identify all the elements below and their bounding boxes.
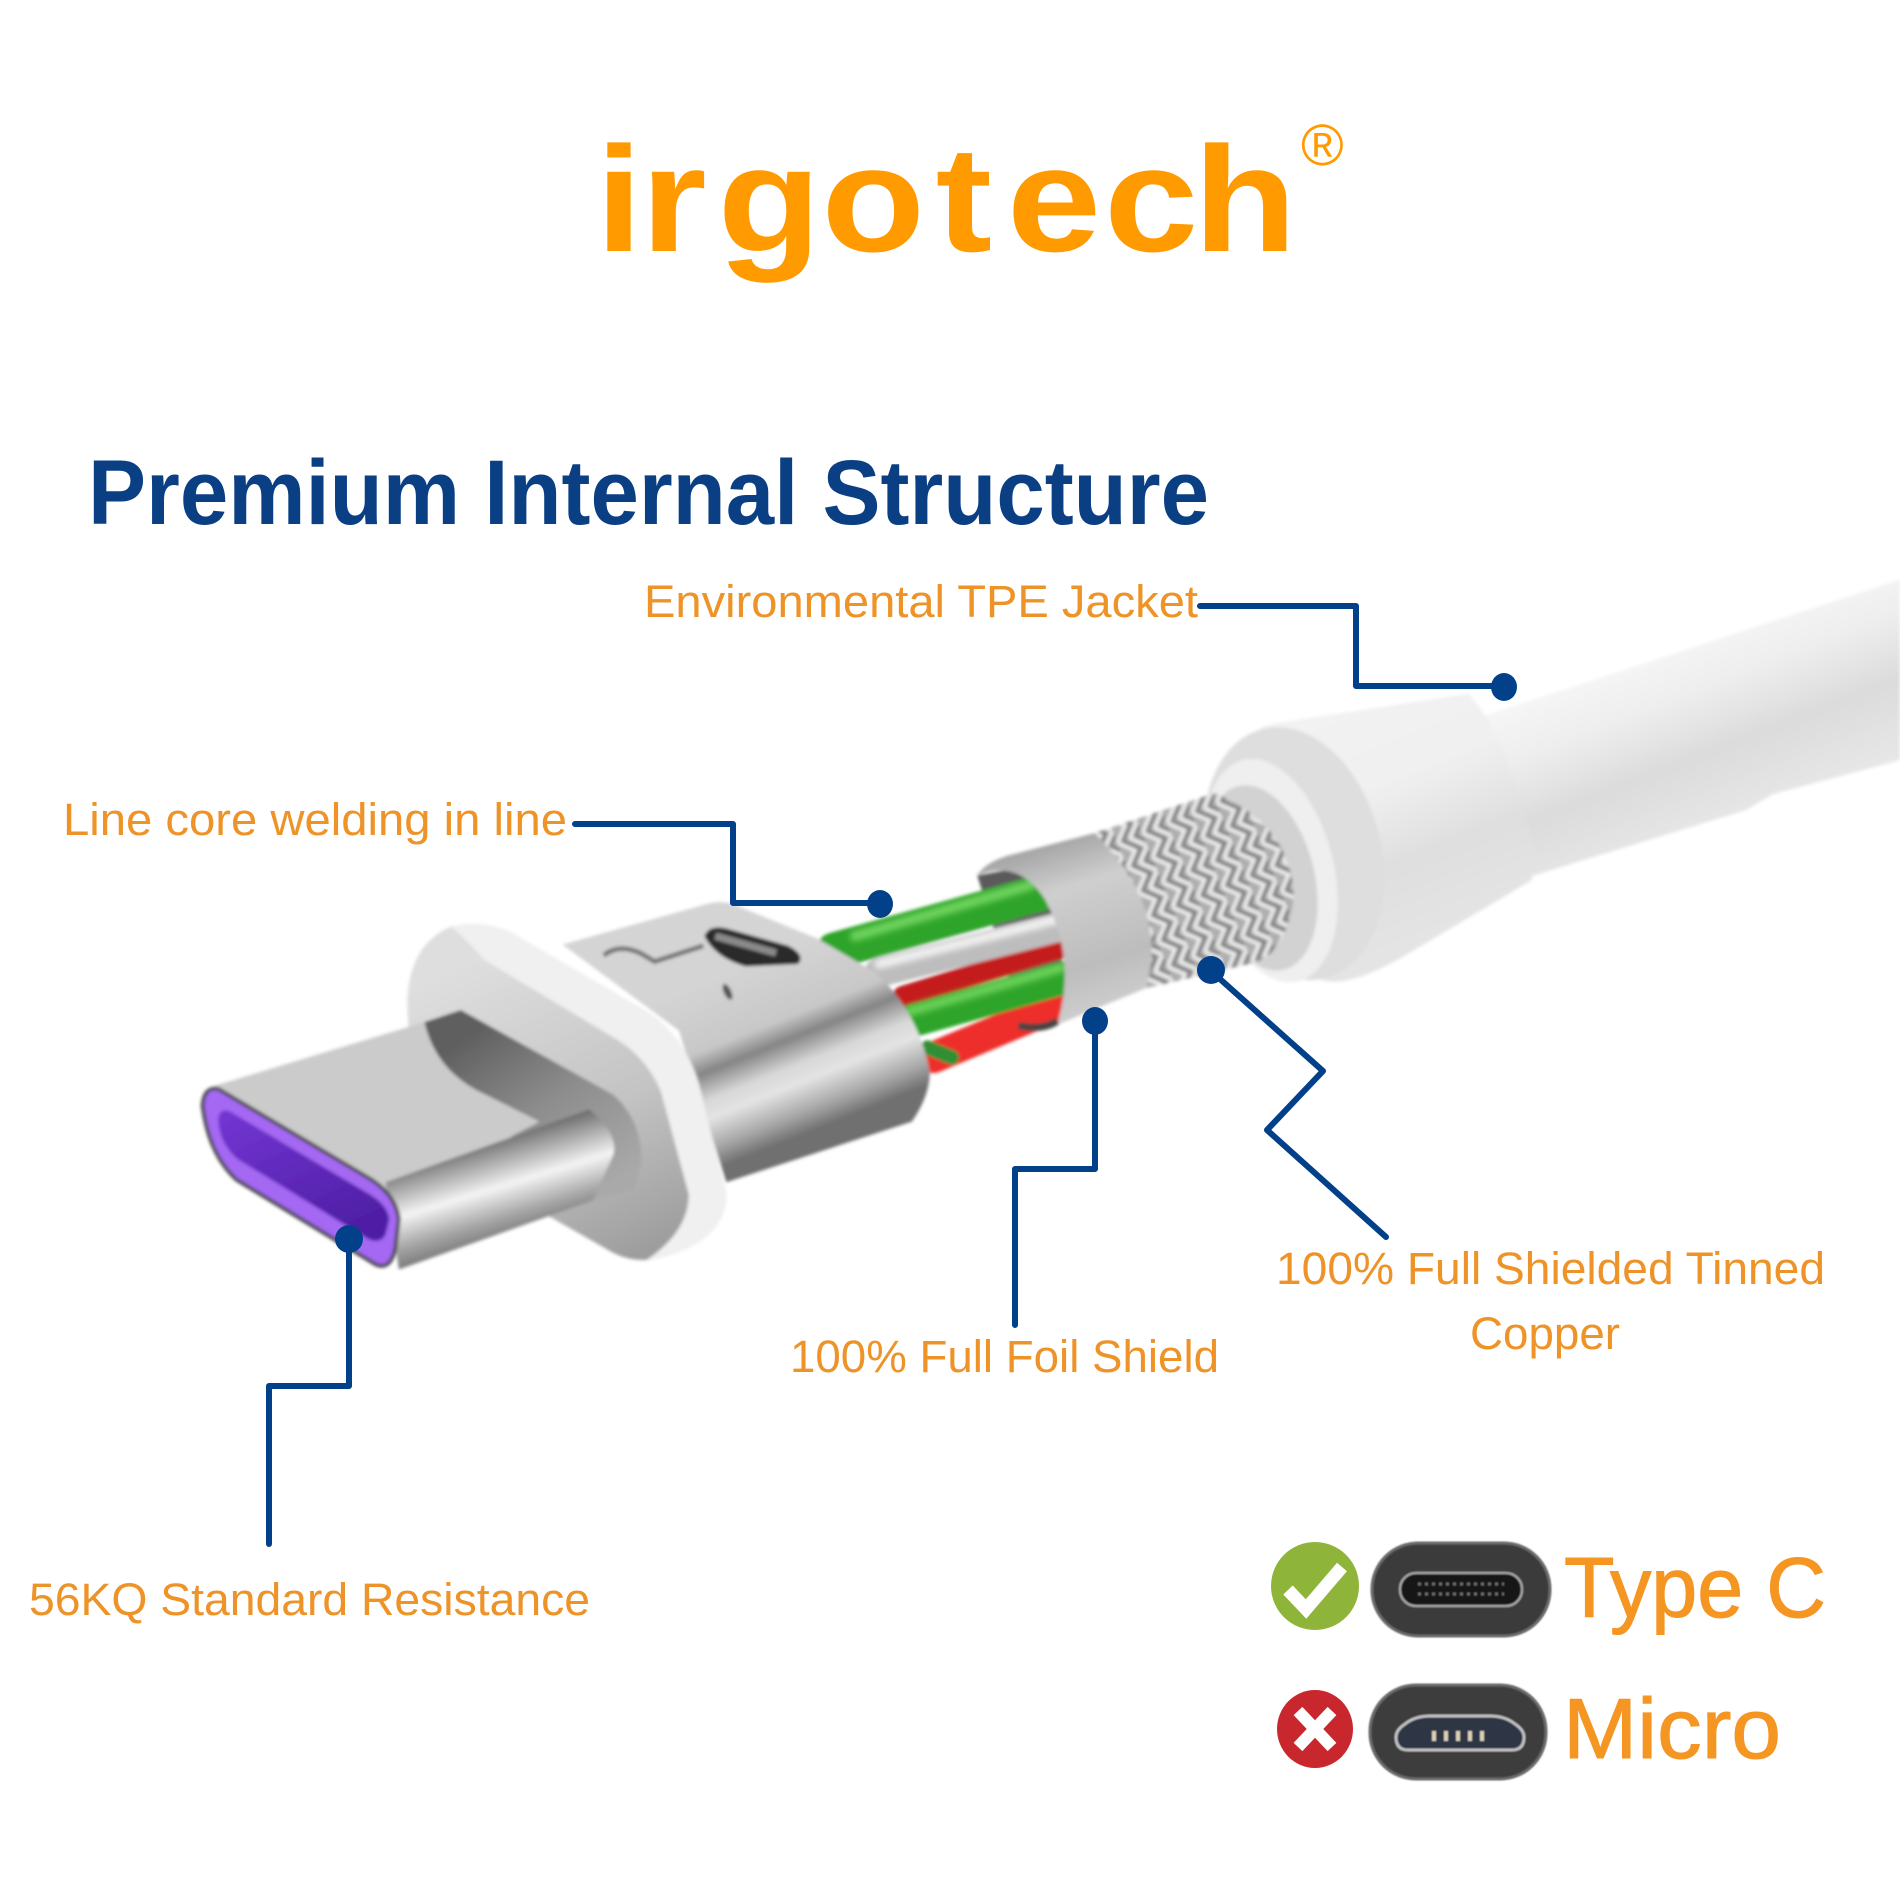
icon: red cross — [1277, 1690, 1353, 1768]
callout: 100% Full Foil Shield — [790, 1007, 1219, 1382]
callout: Line core welding in line: Line core welding in line — [63, 794, 567, 845]
callout: Line core welding in line — [63, 794, 893, 918]
callout: 100% Full Foil Shield: 100% Full Foil Shield — [790, 1331, 1219, 1382]
foil dark rim — [1018, 1021, 1057, 1027]
foil shield — [977, 833, 1152, 1025]
label: Type C: Type C — [1564, 1541, 1826, 1636]
label: Micro: Micro — [1563, 1682, 1781, 1777]
purple tip — [202, 1089, 399, 1266]
callout: 100% Full Shielded Tinned Copper: 100% Full Shielded Tinned — [1276, 1243, 1825, 1294]
white flange — [407, 924, 726, 1261]
callout: Environmental TPE Jacket: Environmental TPE Jacket — [644, 576, 1199, 627]
icon: green check — [1271, 1542, 1359, 1630]
cable jacket — [1485, 580, 1900, 875]
icon: Micro USB port — [1370, 1685, 1546, 1779]
tinned copper braid — [1095, 793, 1294, 988]
green wire lower — [903, 977, 1067, 1023]
callout: 100% Full Shielded Tinned Copper — [1197, 956, 1825, 1359]
metal barrel — [563, 902, 930, 1182]
callout: Environmental TPE Jacket — [644, 576, 1517, 701]
red wire lower — [934, 1002, 1067, 1057]
callout: 56KQ Standard Resistance — [29, 1225, 590, 1625]
white wire — [879, 928, 1057, 972]
dark inner shadow — [977, 863, 1073, 1028]
wires — [834, 863, 1073, 1057]
icon: USB-C port — [1372, 1543, 1550, 1636]
logo: irgotech — [596, 113, 1344, 283]
comparison: Micro — [1277, 1682, 1781, 1779]
green wire stub — [928, 1048, 952, 1057]
flange bright rim — [451, 924, 726, 1261]
barrel small notch — [721, 983, 734, 1001]
comparison: Type C — [1271, 1541, 1826, 1636]
illustration: USB-C cable cutaway — [202, 580, 1900, 1269]
barrel groove — [604, 946, 703, 962]
green wire top — [834, 892, 1043, 951]
strain relief — [1178, 694, 1537, 999]
red wire back — [903, 946, 1067, 997]
registered mark: ® — [1301, 113, 1344, 178]
flange recess — [424, 1010, 641, 1200]
heading: Premium Internal Structure — [88, 442, 1209, 544]
logo wordmark: irgotech — [596, 115, 1297, 283]
callout: 100% Full Shielded Tinned Copper: Copper — [1470, 1308, 1620, 1359]
callout: 56KQ Standard Resistance: 56KQ Standard Resistance — [29, 1574, 590, 1625]
connector tongue — [209, 1022, 614, 1269]
barrel slot — [704, 927, 801, 966]
